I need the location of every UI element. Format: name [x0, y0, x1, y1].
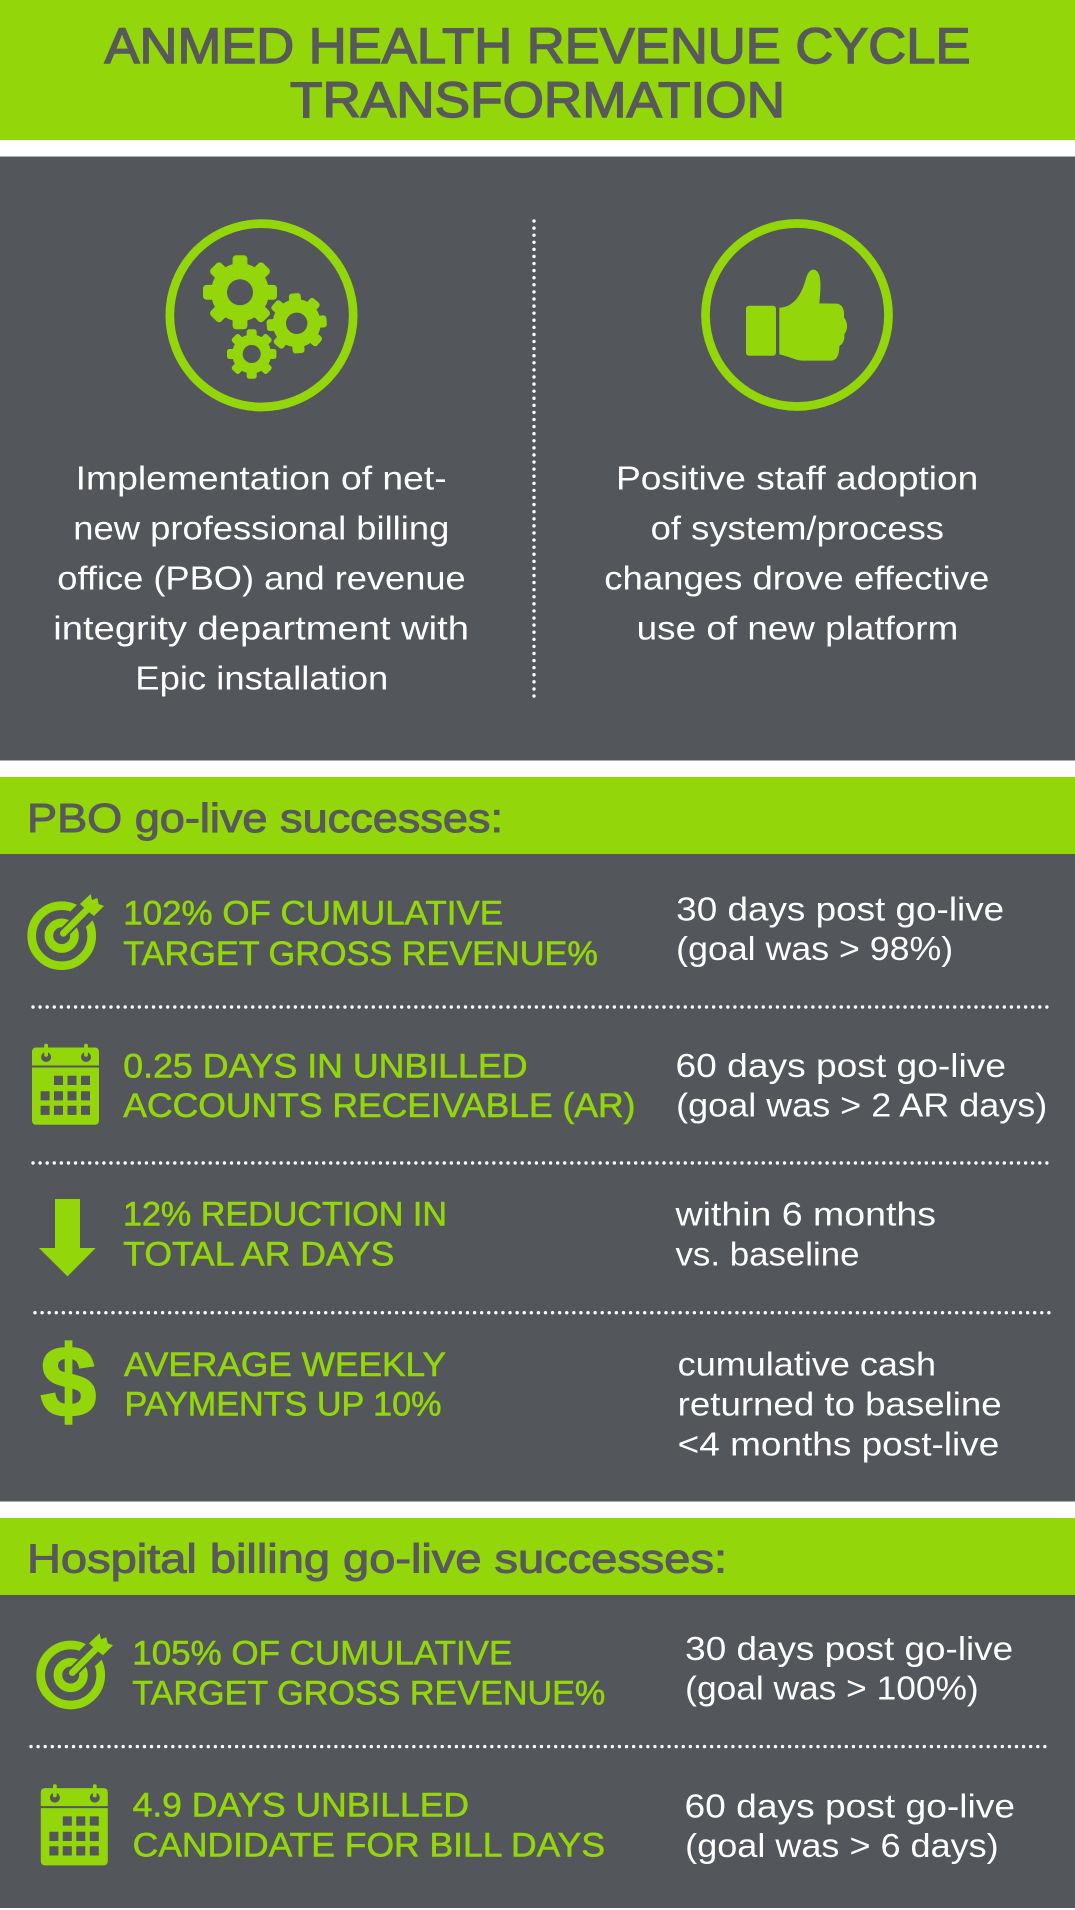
divider: vertical dotted: [532, 221, 536, 702]
note: cumulative cash: cumulative cash: [678, 1345, 936, 1382]
note: 60 days goal: [684, 1787, 1015, 1864]
stat: cumulative target gross revenue: TARGET GROSS REVENUE%: [123, 935, 598, 973]
icon: dollar sign: $: [40, 1326, 96, 1438]
title banner: TRANSFORMATION: [290, 72, 785, 128]
stat: cumulative target gross revenue: TARGET GROSS REVENUE%: [132, 1674, 605, 1712]
note: 60 days goal: 60 days post go-live: [684, 1787, 1015, 1824]
stat: cumulative target gross revenue: 102% OF CUMULATIVE: [123, 894, 503, 932]
text: billing office description: new professional billing: [73, 509, 449, 546]
heading: hospital billing go-live successes: [0, 1518, 1075, 1595]
stat: days in unbilled AR: [123, 1047, 636, 1125]
text: billing office description: Implementation of net-: [76, 459, 447, 496]
stat: days unbilled candidate for bill: CANDIDATE FOR BILL DAYS: [133, 1827, 605, 1865]
note: 60 days goal: [676, 1047, 1047, 1124]
stat: cumulative target gross revenue: [132, 1634, 605, 1712]
note: within 6 months: [674, 1195, 936, 1272]
title banner: ANMED HEALTH REVENUE CYCLE: [104, 18, 971, 74]
note: within 6 months: within 6 months: [674, 1195, 936, 1232]
note: within 6 months: vs. baseline: [676, 1235, 860, 1272]
text: staff adoption description: changes drove effective: [604, 559, 989, 596]
text: billing office description: Epic installation: [135, 659, 388, 696]
stat: average weekly payments: AVERAGE WEEKLY: [124, 1346, 446, 1384]
panel: PBO results: [0, 854, 1075, 1502]
icon: calendar: [41, 1784, 108, 1865]
note: cumulative cash: [678, 1345, 1002, 1462]
stat: days in unbilled AR: ACCOUNTS RECEIVABLE (AR): [123, 1087, 636, 1125]
stat: cumulative target gross revenue: 105% OF CUMULATIVE: [132, 1634, 512, 1672]
heading: PBO go-live successes: PBO go-live successes:: [27, 795, 503, 841]
stat: average weekly payments: PAYMENTS UP 10%: [124, 1386, 442, 1424]
note: 30 days goal: (goal was > 98%): [676, 930, 953, 967]
title banner: [0, 0, 1075, 140]
stat: days in unbilled AR: 0.25 DAYS IN UNBILLED: [123, 1047, 528, 1085]
panel: hospital billing results: [0, 1595, 1075, 1908]
text: staff adoption description: Positive staff adoption: [616, 459, 978, 496]
text: staff adoption description: of system/process: [651, 509, 944, 546]
note: 30 days goal: (goal was > 100%): [685, 1669, 979, 1706]
note: 30 days goal: 30 days post go-live: [685, 1630, 1013, 1667]
stat: days unbilled candidate for bill: [133, 1787, 605, 1865]
icon: calendar: [32, 1044, 99, 1125]
icon: target with arrow: [32, 894, 104, 966]
heading: hospital billing go-live successes: Hospital billing go-live successes:: [27, 1536, 727, 1582]
panel: overview: [0, 156, 1075, 761]
note: 30 days goal: [685, 1630, 1013, 1706]
stat: days unbilled candidate for bill: 4.9 DAYS UNBILLED: [133, 1787, 469, 1825]
note: 60 days goal: (goal was > 6 days): [685, 1827, 999, 1864]
icon: down arrow: [39, 1199, 96, 1276]
text: billing office description: office (PBO) and revenue: [57, 559, 466, 596]
text: staff adoption description: use of new platform: [637, 609, 958, 646]
stat: AR days reduction: TOTAL AR DAYS: [123, 1236, 394, 1274]
note: 30 days goal: [676, 890, 1004, 967]
stat: AR days reduction: [123, 1196, 447, 1274]
note: 30 days goal: 30 days post go-live: [676, 890, 1004, 928]
note: 60 days goal: 60 days post go-live: [676, 1047, 1006, 1084]
text: billing office description: integrity department with: [53, 609, 469, 646]
note: cumulative cash: returned to baseline: [678, 1385, 1002, 1422]
stat: average weekly payments: [124, 1346, 446, 1424]
stat: AR days reduction: 12% REDUCTION IN: [123, 1196, 447, 1234]
note: cumulative cash: <4 months post-live: [678, 1425, 999, 1462]
text: staff adoption description: [604, 459, 989, 646]
text: billing office description: [53, 459, 469, 696]
note: 60 days goal: (goal was > 2 AR days): [676, 1087, 1047, 1124]
icon: target with arrow: [41, 1633, 113, 1705]
icon: thumbs up in circle: [706, 224, 888, 406]
stat: cumulative target gross revenue: [123, 894, 598, 973]
heading: PBO go-live successes: [0, 777, 1075, 854]
icon: gears in circle: [170, 224, 353, 407]
